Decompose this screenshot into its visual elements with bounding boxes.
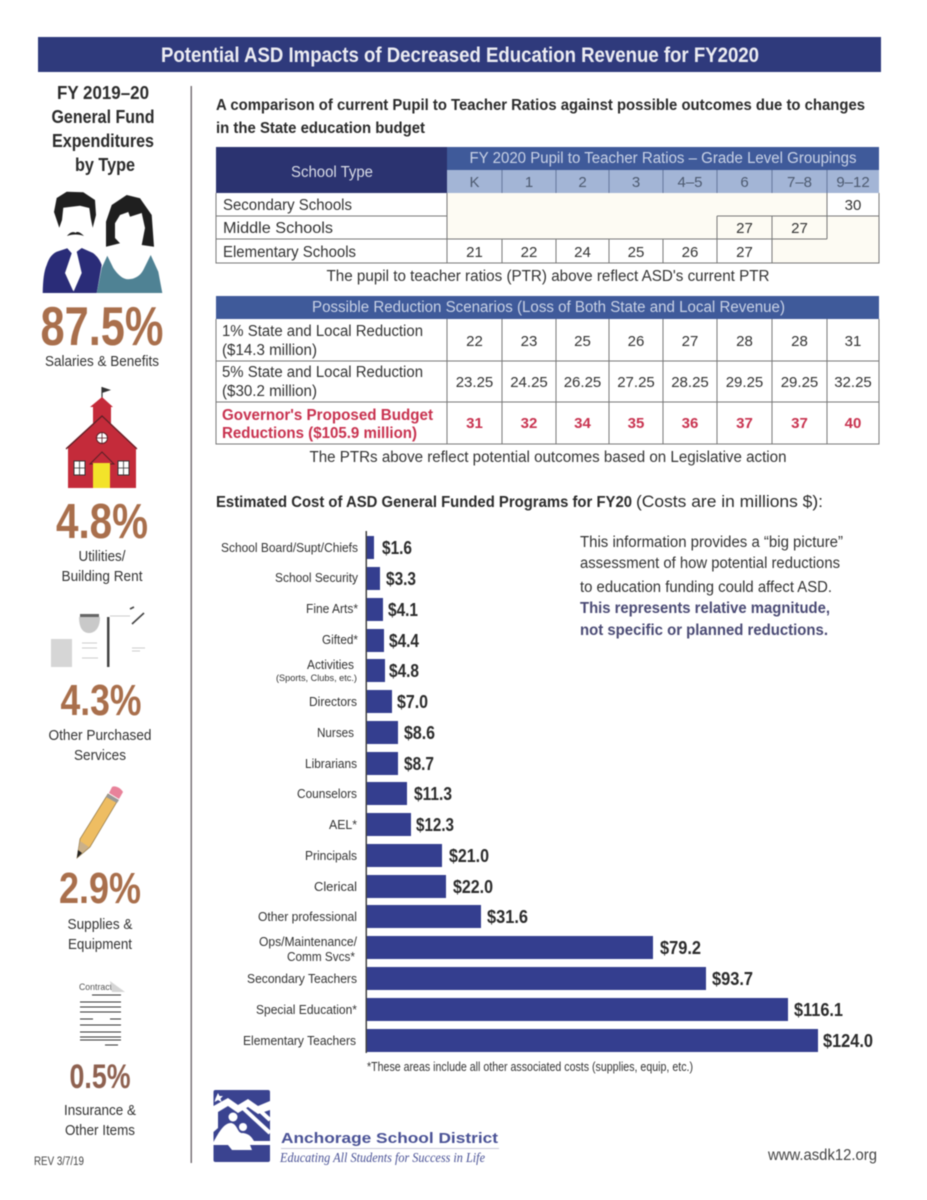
bar chart: program costs — [221, 531, 873, 1053]
row: governor's proposed budget reductions: 34 — [574, 415, 591, 432]
stat: insurance and other items: Other Items — [65, 1122, 135, 1139]
icon: contract document — [79, 981, 125, 1045]
bar: Activities: (Sports, Clubs, etc.) — [276, 673, 357, 684]
table: current pupil to teacher ratios — [216, 147, 879, 263]
bar: Activities: Activities — [307, 657, 354, 672]
table body: 21 — [466, 244, 483, 261]
chart footnote: *These areas include all other associated costs (supplies, equip, etc.) — [367, 1060, 693, 1074]
icon: pencil — [77, 786, 123, 858]
sidebar heading — [52, 83, 154, 175]
stat: other purchased services: Other Purchased — [48, 727, 152, 744]
section heading: pupil to teacher comparison: A comparison of current Pupil to Teacher Ratios against possible outcomes due to changes — [216, 97, 865, 114]
table header: 1 — [525, 174, 533, 191]
icon: contract document: Contract — [79, 982, 112, 992]
callout: big picture note: to education funding could affect ASD. — [580, 579, 832, 596]
stat: other purchased services — [48, 676, 152, 764]
callout: big picture note: This information provides a “big picture” — [580, 534, 843, 551]
stat: insurance and other items: Insurance & — [64, 1102, 136, 1119]
stat: other purchased services: 4.3% — [60, 676, 142, 725]
row: 5% reduction: 32.25 — [834, 374, 872, 391]
row: 1% reduction: 27 — [682, 333, 698, 350]
bar: Counselors — [297, 782, 452, 805]
stat: utilities and building rent — [56, 495, 148, 585]
table body: 27 — [736, 220, 753, 237]
row: 1% reduction: 25 — [574, 333, 591, 350]
icon: faded purchased services graphic — [51, 607, 145, 667]
table body: 27 — [791, 220, 808, 237]
bar: Secondary Teachers — [247, 967, 753, 990]
row: 1% reduction: 26 — [628, 333, 644, 350]
section heading: pupil to teacher comparison: in the State education budget — [216, 120, 426, 137]
bar: School Board/Supt/Chiefs — [221, 536, 412, 559]
table body: 24 — [574, 244, 591, 261]
row: governor's proposed budget reductions: 37 — [736, 415, 753, 432]
row: 1% reduction: 28 — [791, 333, 808, 350]
table header: 9–12 — [836, 174, 870, 191]
stat: utilities and building rent: Utilities/ — [78, 548, 126, 565]
table header: 4–5 — [677, 174, 703, 191]
table header: FY 2020 Pupil to Teacher Ratios – Grade Level Groupings — [470, 150, 857, 167]
row: 5% reduction: 5% State and Local Reduction — [222, 364, 423, 381]
row: governor's proposed budget reductions: 40 — [845, 415, 861, 432]
row: 1% reduction: 1% State and Local Reduction — [222, 323, 423, 340]
table header: 3 — [632, 174, 640, 191]
table header: 6 — [740, 174, 749, 191]
bar: Fine Arts: $4.1 — [388, 600, 418, 620]
bar: Special Education: $116.1 — [794, 1000, 843, 1020]
table body — [216, 193, 879, 263]
section heading: pupil to teacher comparison — [216, 97, 865, 137]
bar: Gifted — [322, 629, 419, 652]
bar: School Security: School Security — [275, 570, 358, 585]
bar: Fine Arts — [306, 598, 418, 621]
bar: Nurses: $8.6 — [404, 723, 435, 743]
icon: red schoolhouse — [66, 387, 137, 488]
table body: 25 — [628, 244, 644, 261]
stat: salaries and benefits — [40, 295, 164, 370]
bar: Counselors: Counselors — [297, 786, 357, 801]
bar: Gifted: Gifted* — [322, 632, 358, 647]
bar: Other professional: $31.6 — [487, 907, 528, 927]
row: 5% reduction: ($30.2 million) — [222, 383, 317, 400]
row: 5% reduction — [222, 364, 872, 400]
row: 1% reduction: 28 — [736, 333, 753, 350]
bar: Librarians — [305, 752, 434, 775]
row: 1% reduction: 22 — [466, 333, 483, 350]
bar: Directors — [309, 690, 428, 713]
row: 5% reduction: 23.25 — [456, 374, 493, 391]
sidebar heading: General Fund — [52, 107, 154, 127]
row: 5% reduction: 27.25 — [617, 374, 655, 391]
table body: Elementary Schools — [223, 244, 356, 261]
bar: AEL — [329, 813, 454, 836]
row: 1% reduction — [222, 323, 861, 359]
row: governor's proposed budget reductions: Reductions ($105.9 million) — [222, 425, 417, 442]
bar: AEL: AEL* — [329, 817, 357, 832]
bar: Nurses — [317, 721, 435, 744]
bar: Elementary Teachers — [243, 1029, 873, 1052]
bar: Special Education: Special Education* — [256, 1002, 357, 1017]
stat: salaries and benefits: 87.5% — [40, 295, 164, 357]
website address: www.asdk12.org — [767, 1147, 877, 1164]
stat: utilities and building rent: Building Rent — [62, 568, 143, 585]
stat: supplies and equipment: Supplies & — [68, 916, 132, 933]
bar: Activities: $4.8 — [389, 661, 419, 681]
row: 5% reduction: 29.25 — [726, 374, 763, 391]
bar: Ops/Maintenance/Comm Svcs — [259, 934, 701, 964]
section heading: estimated program cost: Estimated Cost of ASD General Funded Programs for FY20 — [216, 494, 632, 511]
table: possible reduction scenarios — [216, 296, 879, 444]
table header — [216, 147, 879, 193]
stat: insurance and other items — [64, 1058, 136, 1139]
section heading: estimated program cost: (Costs are in millions $): — [636, 492, 823, 511]
table body: 27 — [736, 244, 753, 261]
stat: utilities and building rent: 4.8% — [56, 495, 148, 549]
callout: big picture note: not specific or planned reductions. — [580, 622, 828, 639]
bar: Secondary Teachers: $93.7 — [712, 969, 753, 989]
bar: Librarians: Librarians — [305, 756, 357, 771]
table body: Secondary Schools — [223, 197, 352, 214]
bar: Clerical: $22.0 — [453, 877, 493, 897]
table body: Middle Schools — [223, 220, 333, 237]
bar: Ops/Maintenance/Comm Svcs: $79.2 — [660, 938, 701, 958]
bar: Clerical: Clerical — [314, 879, 357, 894]
bar: AEL: $12.3 — [416, 815, 454, 835]
callout: big picture note — [580, 534, 843, 639]
column divider line — [190, 86, 192, 1163]
sidebar heading: Expenditures — [52, 131, 154, 151]
stat: supplies and equipment: 2.9% — [59, 864, 141, 913]
table body: 26 — [682, 244, 698, 261]
table: possible reduction scenarios: Possible Reduction Scenarios (Loss of Both State and Local Revenue) — [312, 299, 785, 316]
bar: Activities — [276, 657, 419, 684]
table body: 30 — [845, 197, 861, 214]
title banner: Potential ASD Impacts of Decreased Education Revenue for FY2020 — [161, 44, 759, 67]
row: 1% reduction: 23 — [521, 333, 537, 350]
bar: School Board/Supt/Chiefs: School Board/Supt/Chiefs — [221, 540, 358, 555]
bar: Secondary Teachers: Secondary Teachers — [247, 971, 357, 986]
table header: School Type — [291, 164, 373, 181]
row: governor's proposed budget reductions: 37 — [791, 415, 808, 432]
bar: Ops/Maintenance/Comm Svcs: Comm Svcs* — [287, 949, 355, 964]
table body: 22 — [521, 244, 537, 261]
bar: Principals — [305, 844, 489, 867]
bar: Gifted: $4.4 — [389, 631, 419, 651]
row: governor's proposed budget reductions: 36 — [682, 415, 698, 432]
row: 5% reduction: 24.25 — [510, 374, 548, 391]
section heading: estimated program cost — [216, 492, 823, 511]
icon: two staff silhouettes — [43, 192, 162, 293]
panel: general fund expenditures by type — [34, 83, 164, 1168]
bar: Elementary Teachers: $124.0 — [823, 1031, 873, 1051]
stat: salaries and benefits: Salaries & Benefits — [45, 353, 159, 370]
row: 1% reduction: 31 — [845, 333, 861, 350]
stat: supplies and equipment — [59, 864, 141, 953]
callout: big picture note: assessment of how potential reductions — [580, 555, 840, 572]
bar: Directors: $7.0 — [397, 692, 428, 712]
bar: Counselors: $11.3 — [414, 784, 452, 804]
stat: insurance and other items: 0.5% — [70, 1058, 130, 1096]
row: governor's proposed budget reductions: 32 — [521, 415, 537, 432]
table header: K — [469, 174, 480, 191]
bar: Nurses: Nurses — [317, 725, 354, 740]
bar: Principals: Principals — [305, 848, 357, 863]
row: 5% reduction: 26.25 — [564, 374, 601, 391]
bar: Ops/Maintenance/Comm Svcs: Ops/Maintenance/ — [259, 934, 357, 949]
row: 1% reduction: ($14.3 million) — [222, 342, 317, 359]
bar: School Security — [275, 567, 416, 590]
bar: Elementary Teachers: Elementary Teachers — [243, 1033, 356, 1048]
sidebar heading: by Type — [75, 155, 135, 175]
row: governor's proposed budget reductions: Governor's Proposed Budget — [222, 407, 433, 424]
bar: Special Education — [256, 998, 843, 1021]
sidebar heading: FY 2019–20 — [57, 83, 149, 103]
bar: Librarians: $8.7 — [404, 754, 434, 774]
row: 5% reduction: 29.25 — [781, 374, 818, 391]
stat: supplies and equipment: Equipment — [68, 936, 133, 953]
stat: other purchased services: Services — [74, 747, 126, 764]
bar: Principals: $21.0 — [449, 846, 489, 866]
logo: Anchorage School District: Anchorage School District — [281, 1130, 498, 1147]
bar: School Board/Supt/Chiefs: $1.6 — [382, 538, 412, 558]
bar: Fine Arts: Fine Arts* — [306, 601, 358, 616]
row: 5% reduction: 28.25 — [671, 374, 709, 391]
bar: Directors: Directors — [309, 694, 357, 709]
caption: current PTR: The pupil to teacher ratios (PTR) above reflect ASD's current PTR — [326, 268, 770, 285]
logo mark — [214, 1090, 270, 1162]
row: governor's proposed budget reductions — [222, 407, 861, 442]
caption: legislative action: The PTRs above reflect potential outcomes based on Legislative action — [310, 449, 786, 466]
bar: Other professional — [258, 905, 528, 928]
table header: 2 — [578, 174, 587, 191]
table header: 7–8 — [787, 174, 812, 191]
row: governor's proposed budget reductions: 35 — [628, 415, 644, 432]
logo: Anchorage School District — [214, 1090, 499, 1165]
bar: Clerical — [314, 875, 493, 898]
bar: Other professional: Other professional — [258, 909, 357, 924]
callout: big picture note: This represents relative magnitude, — [580, 600, 830, 617]
bar: School Security: $3.3 — [386, 569, 416, 589]
logo: Anchorage School District: Educating All Students for Success in Life — [279, 1150, 485, 1165]
revision date: REV 3/7/19 — [34, 1156, 84, 1168]
title banner — [38, 37, 881, 72]
row: governor's proposed budget reductions: 31 — [466, 415, 483, 432]
